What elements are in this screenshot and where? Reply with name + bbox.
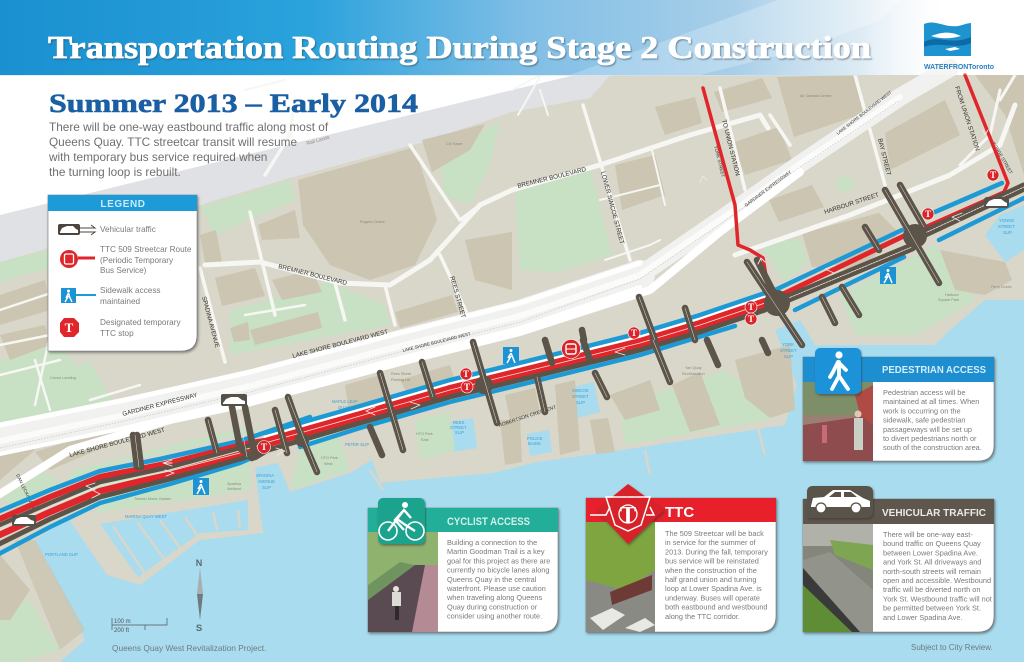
- map labels: streets: LAKE SHORE BOULEVARD WEST: [292, 328, 389, 360]
- legend: streetcar route: [60, 245, 192, 275]
- cyclist text: goal for this project as there are: [447, 556, 550, 565]
- map labels: streets: HTO Park: [416, 432, 433, 436]
- vehicular lanes (dark): [0, 187, 1024, 546]
- cyclist text: Quay during construction or: [447, 602, 538, 611]
- map labels: streets: Yan Quay: [685, 366, 702, 370]
- pedestrian text: work is occurring on the: [882, 406, 961, 415]
- cyclist text: [446, 538, 550, 621]
- panel: legend: [48, 195, 197, 351]
- map labels: streets: REES STREET: [448, 276, 467, 319]
- pedestrian text: maintained at all times. When: [883, 397, 979, 406]
- map labels: streets: PETER SLIP: [345, 442, 369, 447]
- cyclist text: consider using another route.: [447, 612, 542, 621]
- vehicular text: and York St. All driveways and: [883, 558, 981, 567]
- scale bar: [112, 618, 167, 634]
- map labels: streets: LAKE SHORE BOULEVARD WEST: [836, 89, 893, 136]
- map labels: streets: SPADINA: [256, 473, 274, 478]
- vehicular text: between Lower Spadina Ave.: [883, 548, 978, 557]
- subtitle: Summer 2013 – Early 2014: [49, 89, 418, 118]
- temporary ttc stops: T: [748, 302, 754, 312]
- legend: sidewalk: Sidewalk access: [100, 286, 161, 295]
- map labels: streets: HTO Park: [321, 456, 338, 460]
- green spaces: [0, 120, 975, 662]
- map labels: streets: DAN LECKIE WAY: [15, 473, 36, 510]
- cyclist text: currently no bicycle lanes along: [447, 566, 549, 575]
- title: Transportation Routing During Stage 2 Construction: [48, 29, 871, 65]
- icon: car: [807, 486, 873, 518]
- map labels: streets: CN Tower: [446, 142, 463, 146]
- map labels: streets: GARDINER EXPRESSWAY: [122, 392, 198, 418]
- pedestrian text: Pedestrian access will be: [883, 388, 965, 397]
- pedestrian text: [882, 388, 982, 452]
- map labels: streets: BREMNER BOULEVARD: [278, 263, 348, 287]
- map labels: streets: SLIP: [262, 485, 271, 490]
- map labels: streets: BAY STREET: [876, 138, 892, 177]
- ttc text: both eastbound and westbound: [665, 603, 768, 612]
- temporary ttc stops: T: [748, 314, 754, 324]
- vehicular text: traffic will be diverted north on: [883, 585, 980, 594]
- map labels: streets: Rees Street: [391, 372, 412, 376]
- map labels: streets: LOWER SIMCOE STREET: [599, 171, 625, 245]
- white separators: [265, 297, 765, 437]
- temporary ttc stops: T: [464, 382, 470, 392]
- legend: sidewalk: [61, 286, 161, 306]
- cyclist text: waterfront. Please use caution: [446, 584, 546, 593]
- logo: waterfront toronto: WATERFRONToronto: [924, 62, 994, 71]
- pedestrian text: passageways will be set up: [883, 425, 972, 434]
- pedestrian text: to divert pedestrians north or: [883, 434, 977, 443]
- legend: temporary stop: [60, 318, 181, 338]
- map labels: streets: Parking Lot: [391, 378, 411, 382]
- vehicular photo: [803, 524, 873, 632]
- map labels: streets: PORTLAND SLIP: [45, 552, 78, 557]
- ttc text: when the construction of the: [664, 566, 757, 575]
- ttc text: underway. Buses will operate: [665, 593, 760, 602]
- ttc text: 2013. During the fall, temporary: [665, 547, 768, 556]
- marina piers: [113, 428, 765, 575]
- map labels: streets: STREET: [998, 224, 1015, 229]
- ttc text: half grand union and turning: [665, 575, 756, 584]
- vehicular text: north-south streets will remain: [883, 567, 981, 576]
- header band: [0, 0, 1024, 76]
- map labels: streets: West: [324, 462, 334, 466]
- intro paragraph: There will be one-way eastbound traffic along most of: [49, 120, 329, 134]
- temporary ttc stops: T: [631, 328, 637, 338]
- intro paragraph: [48, 120, 329, 179]
- map labels: streets: East: [421, 438, 430, 442]
- legend: sidewalk: maintained: [100, 297, 141, 306]
- streetcar route (red): [0, 75, 1008, 537]
- map labels: streets: SLIP: [455, 430, 464, 435]
- ttc text: [664, 529, 768, 621]
- ttc text: loop at Lower Spadina Ave. is: [665, 584, 762, 593]
- ttc heading: TTC: [665, 504, 694, 521]
- legend: streetcar route: Bus Service): [100, 266, 147, 275]
- pedestrian text: south of the construction area.: [883, 443, 982, 452]
- legend: streetcar route: (Periodic Temporary: [100, 256, 174, 265]
- map labels: streets: BASIN: [528, 441, 541, 446]
- map labels: streets: STREET: [450, 425, 467, 430]
- panel: pedestrian access: [803, 348, 994, 461]
- map labels: streets: Square Park: [938, 298, 959, 302]
- intersection blobs: [295, 224, 927, 447]
- legend: temporary stop: TTC stop: [100, 329, 134, 338]
- map labels: streets: REES: [453, 420, 465, 425]
- pedestrian text: sidewalk, safe pedestrian: [883, 416, 965, 425]
- intro paragraph: with temporary bus service required when: [48, 150, 267, 164]
- map labels: streets: Ferry Docks: [991, 285, 1012, 289]
- legend: vehicular traffic: [58, 224, 156, 235]
- intro paragraph: the turning loop is rebuilt.: [49, 165, 181, 179]
- map labels: streets: SLIP: [1003, 230, 1012, 235]
- map labels: streets: Rogers Centre: [360, 220, 385, 224]
- cyclist text: Queens Quay in the central: [447, 575, 537, 584]
- map labels: streets: Revitalization: [682, 372, 705, 376]
- water: lake ontario: [0, 180, 1024, 662]
- ttc photo: [586, 522, 655, 632]
- icon: ttc logo: [590, 484, 664, 544]
- vehicular text: There will be one-way east-: [883, 530, 973, 539]
- road center markings: [0, 187, 1024, 532]
- panel: vehicular traffic: [803, 486, 994, 632]
- scale bar: 200 ft: [114, 628, 129, 634]
- temporary ttc stops: T: [261, 442, 267, 452]
- vehicular text: York St. Westbound traffic will not: [883, 594, 992, 603]
- map labels: streets: Toronto Music Garden: [134, 497, 171, 501]
- map labels: streets: AVENUE: [258, 479, 275, 484]
- compass: [196, 558, 203, 634]
- rail lands band: [0, 75, 700, 268]
- cyclist text: Building a connection to the: [447, 538, 537, 547]
- cyclist heading: CYCLIST ACCESS: [447, 516, 530, 528]
- vehicular text: bound traffic on Queens Quay: [883, 539, 981, 548]
- map labels: streets: YONGE STREET: [991, 141, 1014, 175]
- vehicular text: be permitted between York St.: [883, 604, 981, 613]
- map labels: streets: QUAY: [338, 405, 350, 410]
- city streets: [0, 75, 1015, 410]
- map labels: streets: Rail Lands: [306, 135, 331, 147]
- map labels: streets: YORK STREET: [713, 145, 726, 178]
- map labels: streets: MARINA QUAY WEST: [125, 514, 167, 519]
- gardiner expressway and lake shore boulevard: [0, 68, 950, 497]
- map labels: streets: YONGE: [999, 218, 1014, 223]
- legend: streetcar route: TTC 509 Streetcar Route: [100, 245, 192, 254]
- map labels: streets: STREET: [780, 348, 797, 353]
- icon: pedestrian: [815, 348, 861, 394]
- cyclist photo: [368, 532, 438, 632]
- map labels: streets: BREMNER BOULEVARD: [517, 166, 587, 190]
- icon: streetcar on route: [562, 340, 580, 358]
- pedestrian heading: PEDESTRIAN ACCESS: [882, 365, 986, 376]
- map labels: streets: MAPLE LEAF: [332, 399, 358, 404]
- map labels: streets: SPADINA AVENUE: [200, 296, 220, 348]
- ttc text: in service for the summer of: [665, 538, 757, 547]
- cyclist text: when traveling along Queens: [446, 593, 542, 602]
- map labels: streets: Harbour: [945, 293, 959, 297]
- icon: map car markers: [12, 197, 1009, 526]
- temporary ttc stops: T: [463, 369, 469, 379]
- map labels: streets: STREET: [572, 394, 589, 399]
- ttc text: The 509 Streetcar will be back: [665, 529, 764, 538]
- map labels: streets: POLICE: [527, 436, 543, 441]
- pedestrian photo: [803, 382, 873, 461]
- vehicular text: and Lower Spadina Ave.: [883, 613, 962, 622]
- map labels: streets: [15, 85, 1015, 557]
- map labels: streets: GARDINER EXPRESSWAY: [744, 169, 792, 208]
- vehicular text: open and accessible. Westbound: [883, 576, 991, 585]
- legend: temporary stop: T: [65, 320, 74, 335]
- temporary ttc stops: T: [925, 209, 931, 219]
- scale bar: 100 m: [114, 619, 131, 625]
- sidewalk access lines (blue): [0, 183, 1024, 556]
- map labels: streets: FROM UNION STATION: [953, 85, 981, 152]
- ttc text: bus service will be reinstated: [665, 557, 759, 566]
- cross streets (dark stubs): [133, 185, 939, 472]
- map labels: streets: ROBERTSON CRESCENT: [498, 405, 557, 429]
- map labels: streets: Spadina: [227, 482, 242, 486]
- icon: map pedestrian markers: [193, 267, 896, 495]
- panel: ttc: [586, 484, 776, 632]
- map labels: streets: LAKE SHORE BOULEVARD WEST: [402, 331, 471, 353]
- vehicular heading: VEHICULAR TRAFFIC: [882, 508, 986, 519]
- cyclist text: Martin Goodman Trail is a key: [447, 547, 545, 556]
- compass: N: [196, 558, 202, 568]
- logo: waterfront toronto: [924, 22, 994, 71]
- map labels: streets: Air Canada Centre: [800, 94, 831, 98]
- map labels: streets: SLIP: [576, 400, 585, 405]
- panel: cyclist access: [368, 498, 558, 632]
- traffic direction arrows: [86, 130, 988, 498]
- marina and slips water: [100, 205, 1024, 577]
- legend heading: LEGEND: [100, 199, 146, 210]
- legend: vehicular traffic: Vehicular traffic: [100, 225, 156, 234]
- map labels: streets: TO UNION STATION: [720, 119, 741, 177]
- cross street lane lines: [135, 185, 939, 472]
- map labels: streets: SLIP: [784, 354, 793, 359]
- map labels: streets: LAKE SHORE BOULEVARD WEST: [69, 427, 166, 459]
- icon: bicycle: [378, 498, 425, 544]
- map labels: streets: YORK: [782, 342, 794, 347]
- temporary ttc stops: T: [990, 170, 996, 180]
- map labels: streets: Canoe Landing: [50, 376, 76, 380]
- map labels: streets: HARBOUR STREET: [823, 192, 880, 216]
- compass: S: [196, 623, 202, 634]
- map labels: streets: SIMCOE: [572, 388, 589, 393]
- vehicular text: [883, 530, 992, 622]
- map labels: streets: Wetland: [227, 487, 241, 491]
- review note: Subject to City Review.: [911, 643, 993, 652]
- temporary ttc stops: [258, 169, 999, 454]
- ttc text: along the TTC corridor.: [665, 612, 740, 621]
- legend: temporary stop: Designated temporary: [100, 318, 181, 327]
- project credit: Queens Quay West Revitalization Project.: [112, 643, 266, 653]
- icon: ttc logo: T: [620, 503, 636, 529]
- intro paragraph: Queens Quay. TTC streetcar transit will resume: [49, 135, 297, 149]
